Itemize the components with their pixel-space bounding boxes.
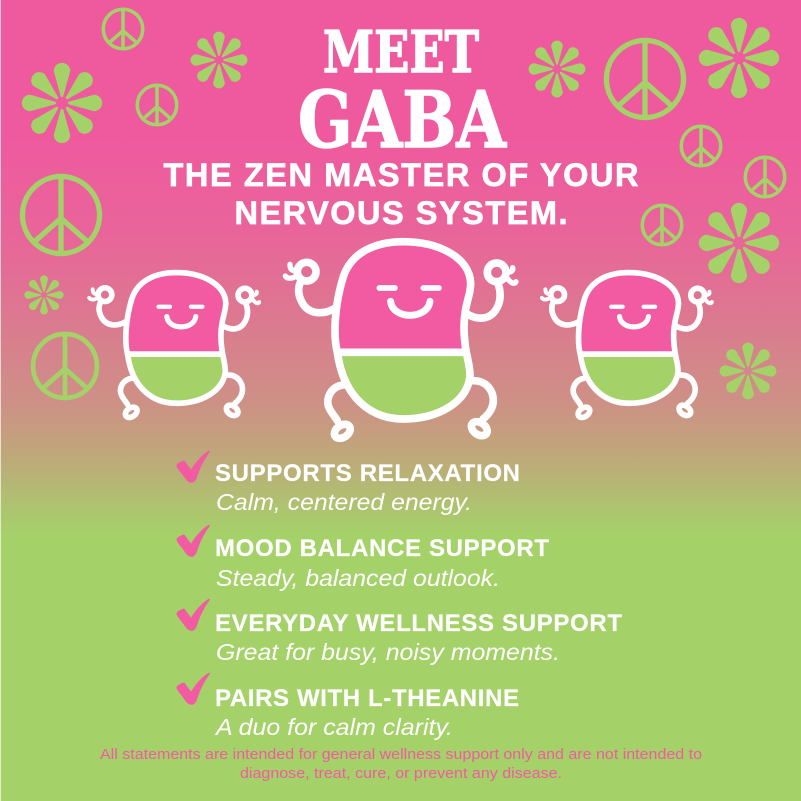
benefit: l-theanine [177, 673, 519, 740]
character: right bean [542, 273, 712, 420]
disclaimer [100, 747, 702, 782]
character: center bean [285, 242, 516, 441]
benefit: wellness: Great for busy, noisy moments. [216, 639, 560, 665]
flowers [22, 18, 779, 399]
benefit: wellness [177, 599, 622, 665]
benefit: relaxation: Calm, centered energy. [216, 489, 472, 515]
title [298, 19, 507, 166]
character: left bean [89, 273, 259, 420]
subtitle: NERVOUS SYSTEM. [234, 195, 568, 231]
benefit: mood [177, 525, 549, 591]
benefit: mood: Steady, balanced outlook. [216, 565, 500, 591]
benefit: relaxation [177, 451, 520, 515]
benefit: wellness: EVERYDAY WELLNESS SUPPORT [215, 610, 622, 637]
subtitle: THE ZEN MASTER OF YOUR [164, 157, 638, 193]
benefit: l-theanine: PAIRS WITH L-THEANINE [215, 685, 519, 712]
benefit: relaxation: SUPPORTS RELAXATION [215, 460, 520, 487]
benefit: l-theanine: A duo for calm clarity. [214, 714, 453, 740]
peace signs [22, 9, 785, 398]
benefit: mood: MOOD BALANCE SUPPORT [215, 535, 549, 562]
title: MEET [323, 19, 479, 86]
subtitle [164, 157, 638, 231]
disclaimer: All statements are intended for general wellness support only and are not intended to [100, 747, 702, 763]
title: GABA [298, 75, 507, 166]
disclaimer: diagnose, treat, cure, or prevent any disease. [240, 766, 562, 782]
